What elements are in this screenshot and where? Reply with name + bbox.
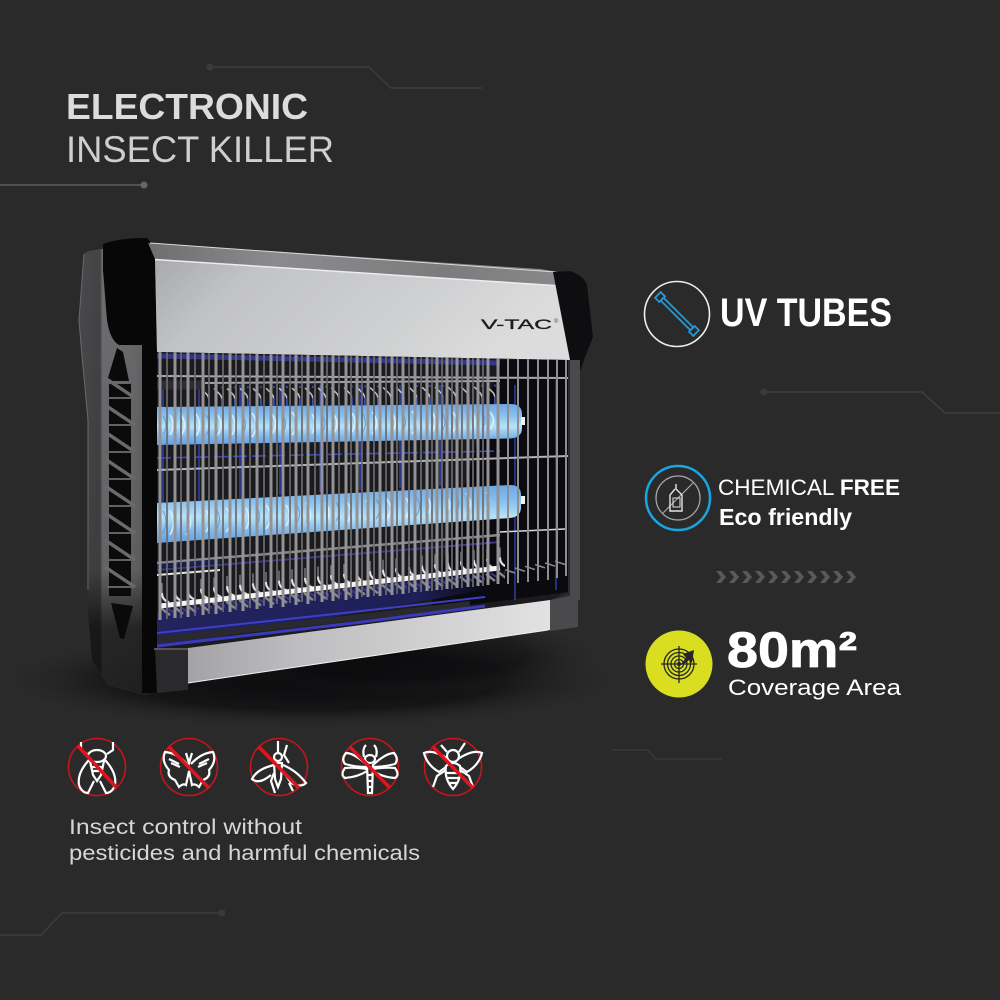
label: chemical free and eco friendly: Eco friendly [719,504,852,530]
label: UV tubes: UV TUBES [720,291,892,335]
label: 80m2 coverage area: Coverage Area [728,675,902,700]
icon: UV tube [644,282,710,346]
device right foot [550,594,578,631]
logo: V-TAC: V-TAC [481,316,552,332]
icon: no mosquito [250,738,308,796]
title: INSECT KILLER [66,129,334,170]
device bottom silver tray [188,600,550,683]
blue inner wires [163,380,556,600]
device vent slots [105,348,135,639]
icon: chemical free [646,466,710,530]
label: 80m2 coverage area [727,622,902,700]
icon: no cicada [68,738,126,796]
caption text: Insect control without [69,816,302,839]
device top face [148,243,570,286]
circuit decoration: right [760,388,1000,413]
right section hooks [505,560,565,574]
device black frame left [103,238,157,693]
circuit decoration: top [206,64,482,88]
circuit decoration: bottom left [0,910,226,935]
upper kink band [205,384,500,406]
device right black frame [553,271,593,600]
label: chemical free and eco friendly: CHEMICAL FREE [718,475,900,500]
logo: V-TAC: ® [554,318,559,325]
device grid right dark section [430,360,568,610]
horizontal wires [157,376,568,575]
label: 80m2 coverage area: 80m² [727,622,857,678]
caption text: pesticides and harmful chemicals [69,842,420,865]
floor shadow [0,615,630,730]
lower hooks band [160,544,505,620]
blue tray lines [157,604,470,640]
device left side housing [79,249,157,695]
upper UV tube [157,404,525,445]
icon: coverage target [646,630,712,698]
product: insect killer device [79,238,593,695]
chevron divider [716,571,856,583]
grid and tubes [157,352,568,648]
lower UV tube [157,485,525,543]
lower blue tray glow [157,572,485,648]
lower white wire bar [160,568,500,606]
device top highlight [150,243,556,272]
blue light along top of grid [157,356,500,363]
device left foot [154,648,188,693]
label: chemical free and eco friendly [718,475,900,530]
front grid wires [160,352,566,620]
device panel top edge [155,260,570,286]
icon: no butterfly [160,738,218,796]
back grid wires [167,352,483,619]
circuit decoration: under title [0,182,148,188]
logo: V-TAC [481,316,559,332]
caption text [69,816,420,865]
icon: no dragonfly [342,738,398,796]
icon: no bee [424,738,482,796]
device front silver panel [155,259,570,360]
circuit decoration: lower right [612,750,722,759]
device tray lower edge highlight [188,630,548,683]
device grid interior [157,352,568,648]
title: ELECTRONIC [66,86,308,127]
title [66,86,334,170]
